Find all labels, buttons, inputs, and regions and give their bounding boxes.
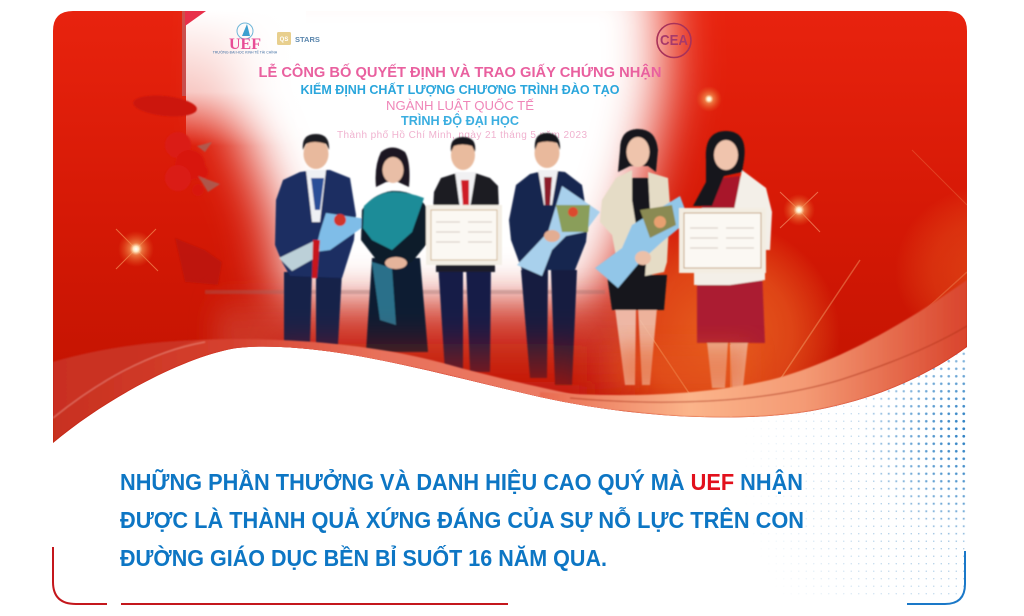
stage backdrop title: KIỂM ĐỊNH CHẤT LƯỢNG CHƯƠNG TRÌNH ĐÀO TẠO — [300, 82, 620, 97]
logo: CEA — [657, 24, 691, 58]
stage backdrop title: TRÌNH ĐỘ ĐẠI HỌC — [401, 113, 520, 128]
person 5 — [595, 129, 689, 385]
wall glow — [232, 0, 665, 310]
halftone dots background — [754, 352, 966, 594]
person 4 — [509, 133, 600, 385]
logo: QS Stars: STARS — [295, 35, 320, 44]
person 2 — [361, 148, 430, 352]
person 3 — [426, 137, 502, 372]
logo: UEF — [213, 23, 278, 54]
stage backdrop title: NGÀNH LUẬT QUỐC TẾ — [386, 98, 534, 113]
logo: QS Stars — [277, 32, 320, 45]
main message text — [120, 467, 804, 571]
logo: UEF: UEF — [229, 36, 261, 53]
stage frame and corner ribbon — [182, 11, 186, 96]
frame: red bottom-left bracket — [53, 547, 508, 604]
light rays — [640, 150, 967, 417]
main message text: NHỮNG PHẦN THƯỞNG VÀ DANH HIỆU CAO QUÝ MÀ UEF NHẬN — [120, 467, 803, 495]
sparkles — [116, 86, 820, 271]
logo: QS Stars: QS — [280, 37, 288, 43]
hero photo panel — [53, 0, 1024, 451]
logo: CEA: CEA — [660, 32, 688, 49]
main message text: ĐƯỢC LÀ THÀNH QUẢ XỨNG ĐÁNG CỦA SỰ NỖ LỰC TRÊN CON — [120, 505, 804, 533]
left ribbon — [53, 339, 640, 443]
main message text: ĐƯỜNG GIÁO DỤC BỀN BỈ SUỐT 16 NĂM QUA. — [120, 543, 607, 571]
right ribbon — [540, 280, 967, 417]
group of people — [275, 129, 772, 388]
stage backdrop title: LỄ CÔNG BỐ QUYẾT ĐỊNH VÀ TRAO GIẤY CHỨNG NHẬN — [258, 63, 662, 81]
person 1 — [275, 134, 373, 345]
floor fade — [215, 288, 635, 413]
frame: blue bottom-right bracket — [907, 551, 965, 604]
legs fade into floor — [272, 325, 750, 410]
logo: UEF: TRƯỜNG ĐẠI HỌC KINH TẾ TÀI CHÍNH — [213, 50, 278, 54]
stage backdrop title: Thành phố Hồ Chí Minh, ngày 21 tháng 5 năm 2023 — [337, 129, 587, 141]
flower stand — [132, 93, 222, 285]
stage backdrop title — [258, 63, 662, 141]
person 6 — [679, 131, 772, 388]
